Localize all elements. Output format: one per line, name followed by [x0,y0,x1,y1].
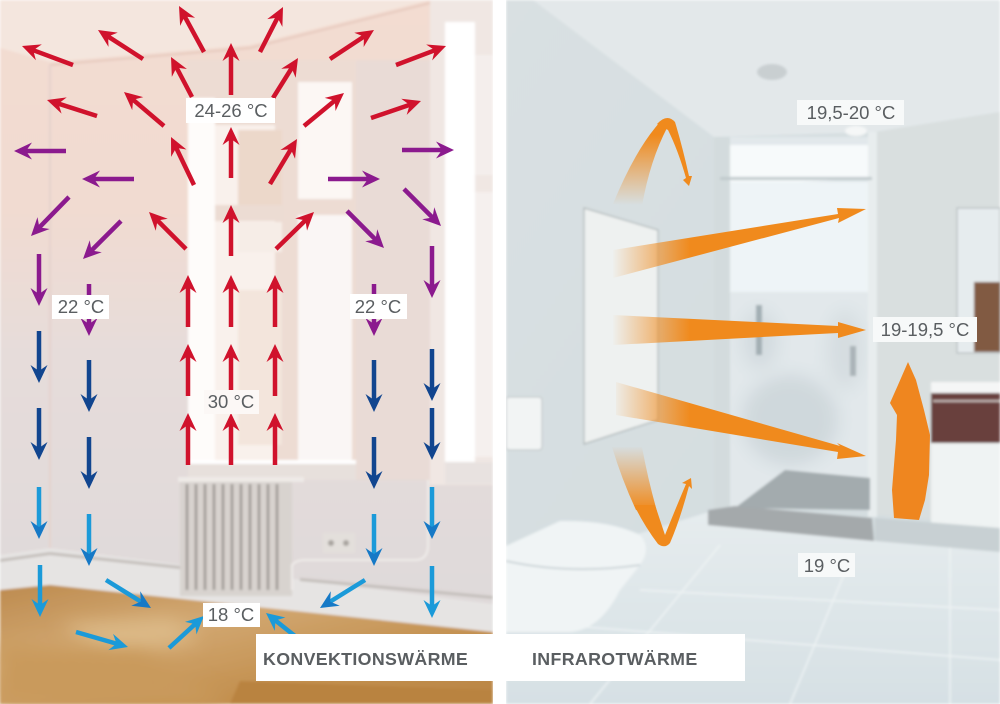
toilet [506,521,646,632]
right window [430,0,493,485]
purple arrows: air cooling [14,150,454,336]
radiator [180,478,292,596]
light blue arrows: cool air at floor [39,487,432,648]
heading: Konvektionswärme: KONVEKTIONSWÄRME [263,649,468,669]
label: 24-26 °C [186,98,275,123]
orange arrows: infrared radiation [612,118,866,546]
pillar between windows [368,62,428,144]
red arrows: warm air rising [22,6,446,465]
flush plate [506,397,542,450]
heating panel [584,208,658,444]
label: 24-26 °C: 24-26 °C [194,100,268,121]
label: 22 °C right: 22 °C [355,296,401,317]
window frame [278,398,355,458]
label: 19-19,5 °C: 19-19,5 °C [881,319,969,340]
label: 22 °C right [350,294,407,319]
ceiling lamps [757,64,787,80]
ceiling [0,0,430,62]
label: 19,5-20 °C: 19,5-20 °C [807,102,895,123]
icon: orange towel [890,362,930,520]
arrow: ray to shower bottom [616,382,866,459]
side wall [875,112,1000,525]
label: 30 °C: 30 °C [208,391,254,412]
caption bar [256,634,745,681]
panel: convection room photo [0,0,493,704]
dark blue arrows: air sinking [39,331,432,489]
label: 22 °C left: 22 °C [58,296,104,317]
arrow: ray to shower top [613,208,866,278]
floor [598,513,1000,656]
wall cove [875,518,1000,552]
arrow: ray to shower middle [613,315,866,345]
wooden floor [0,585,493,704]
panel: infrared bathroom photo [506,0,1000,704]
vanity [931,382,1000,394]
cornice [50,3,430,65]
mirror [957,208,1000,353]
label: 18 °C: 18 °C [208,604,254,625]
arrow: lower curved radiation [612,447,692,546]
label: 19,5-20 °C [797,100,904,125]
heading: Infrarotwärme: INFRAROTWÄRME [532,649,698,669]
socket [323,533,355,553]
shower [730,138,868,506]
skirting [0,548,493,632]
arrow: upper curved radiation [613,118,692,206]
label: 19 °C: 19 °C [804,555,850,576]
ceiling [533,0,1000,137]
shower floor [735,470,870,510]
